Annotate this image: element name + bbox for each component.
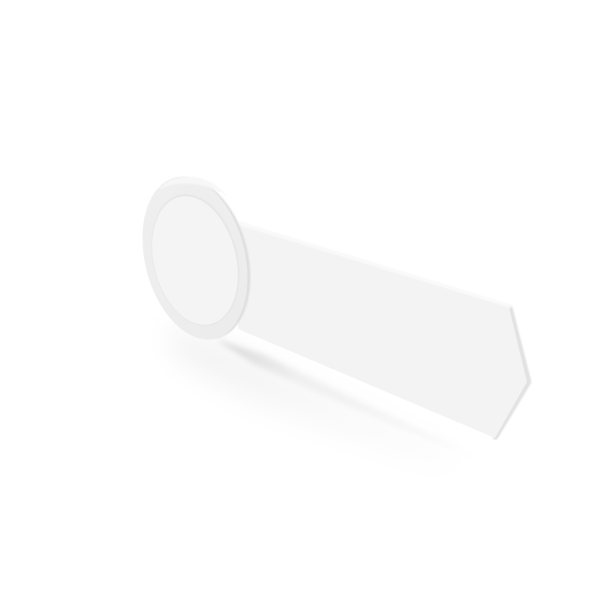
round badge xyxy=(126,165,266,351)
badge rim top light xyxy=(158,176,228,197)
arrow-shaped label panel xyxy=(238,221,531,440)
label front face xyxy=(238,224,527,438)
badge inner bevel xyxy=(139,185,252,335)
badge rim xyxy=(126,165,264,351)
label right edge thickness xyxy=(493,305,531,440)
label top edge highlight xyxy=(238,221,511,308)
badge side thickness xyxy=(130,167,266,350)
badge inner face xyxy=(139,187,251,334)
ground shadow xyxy=(165,325,500,470)
